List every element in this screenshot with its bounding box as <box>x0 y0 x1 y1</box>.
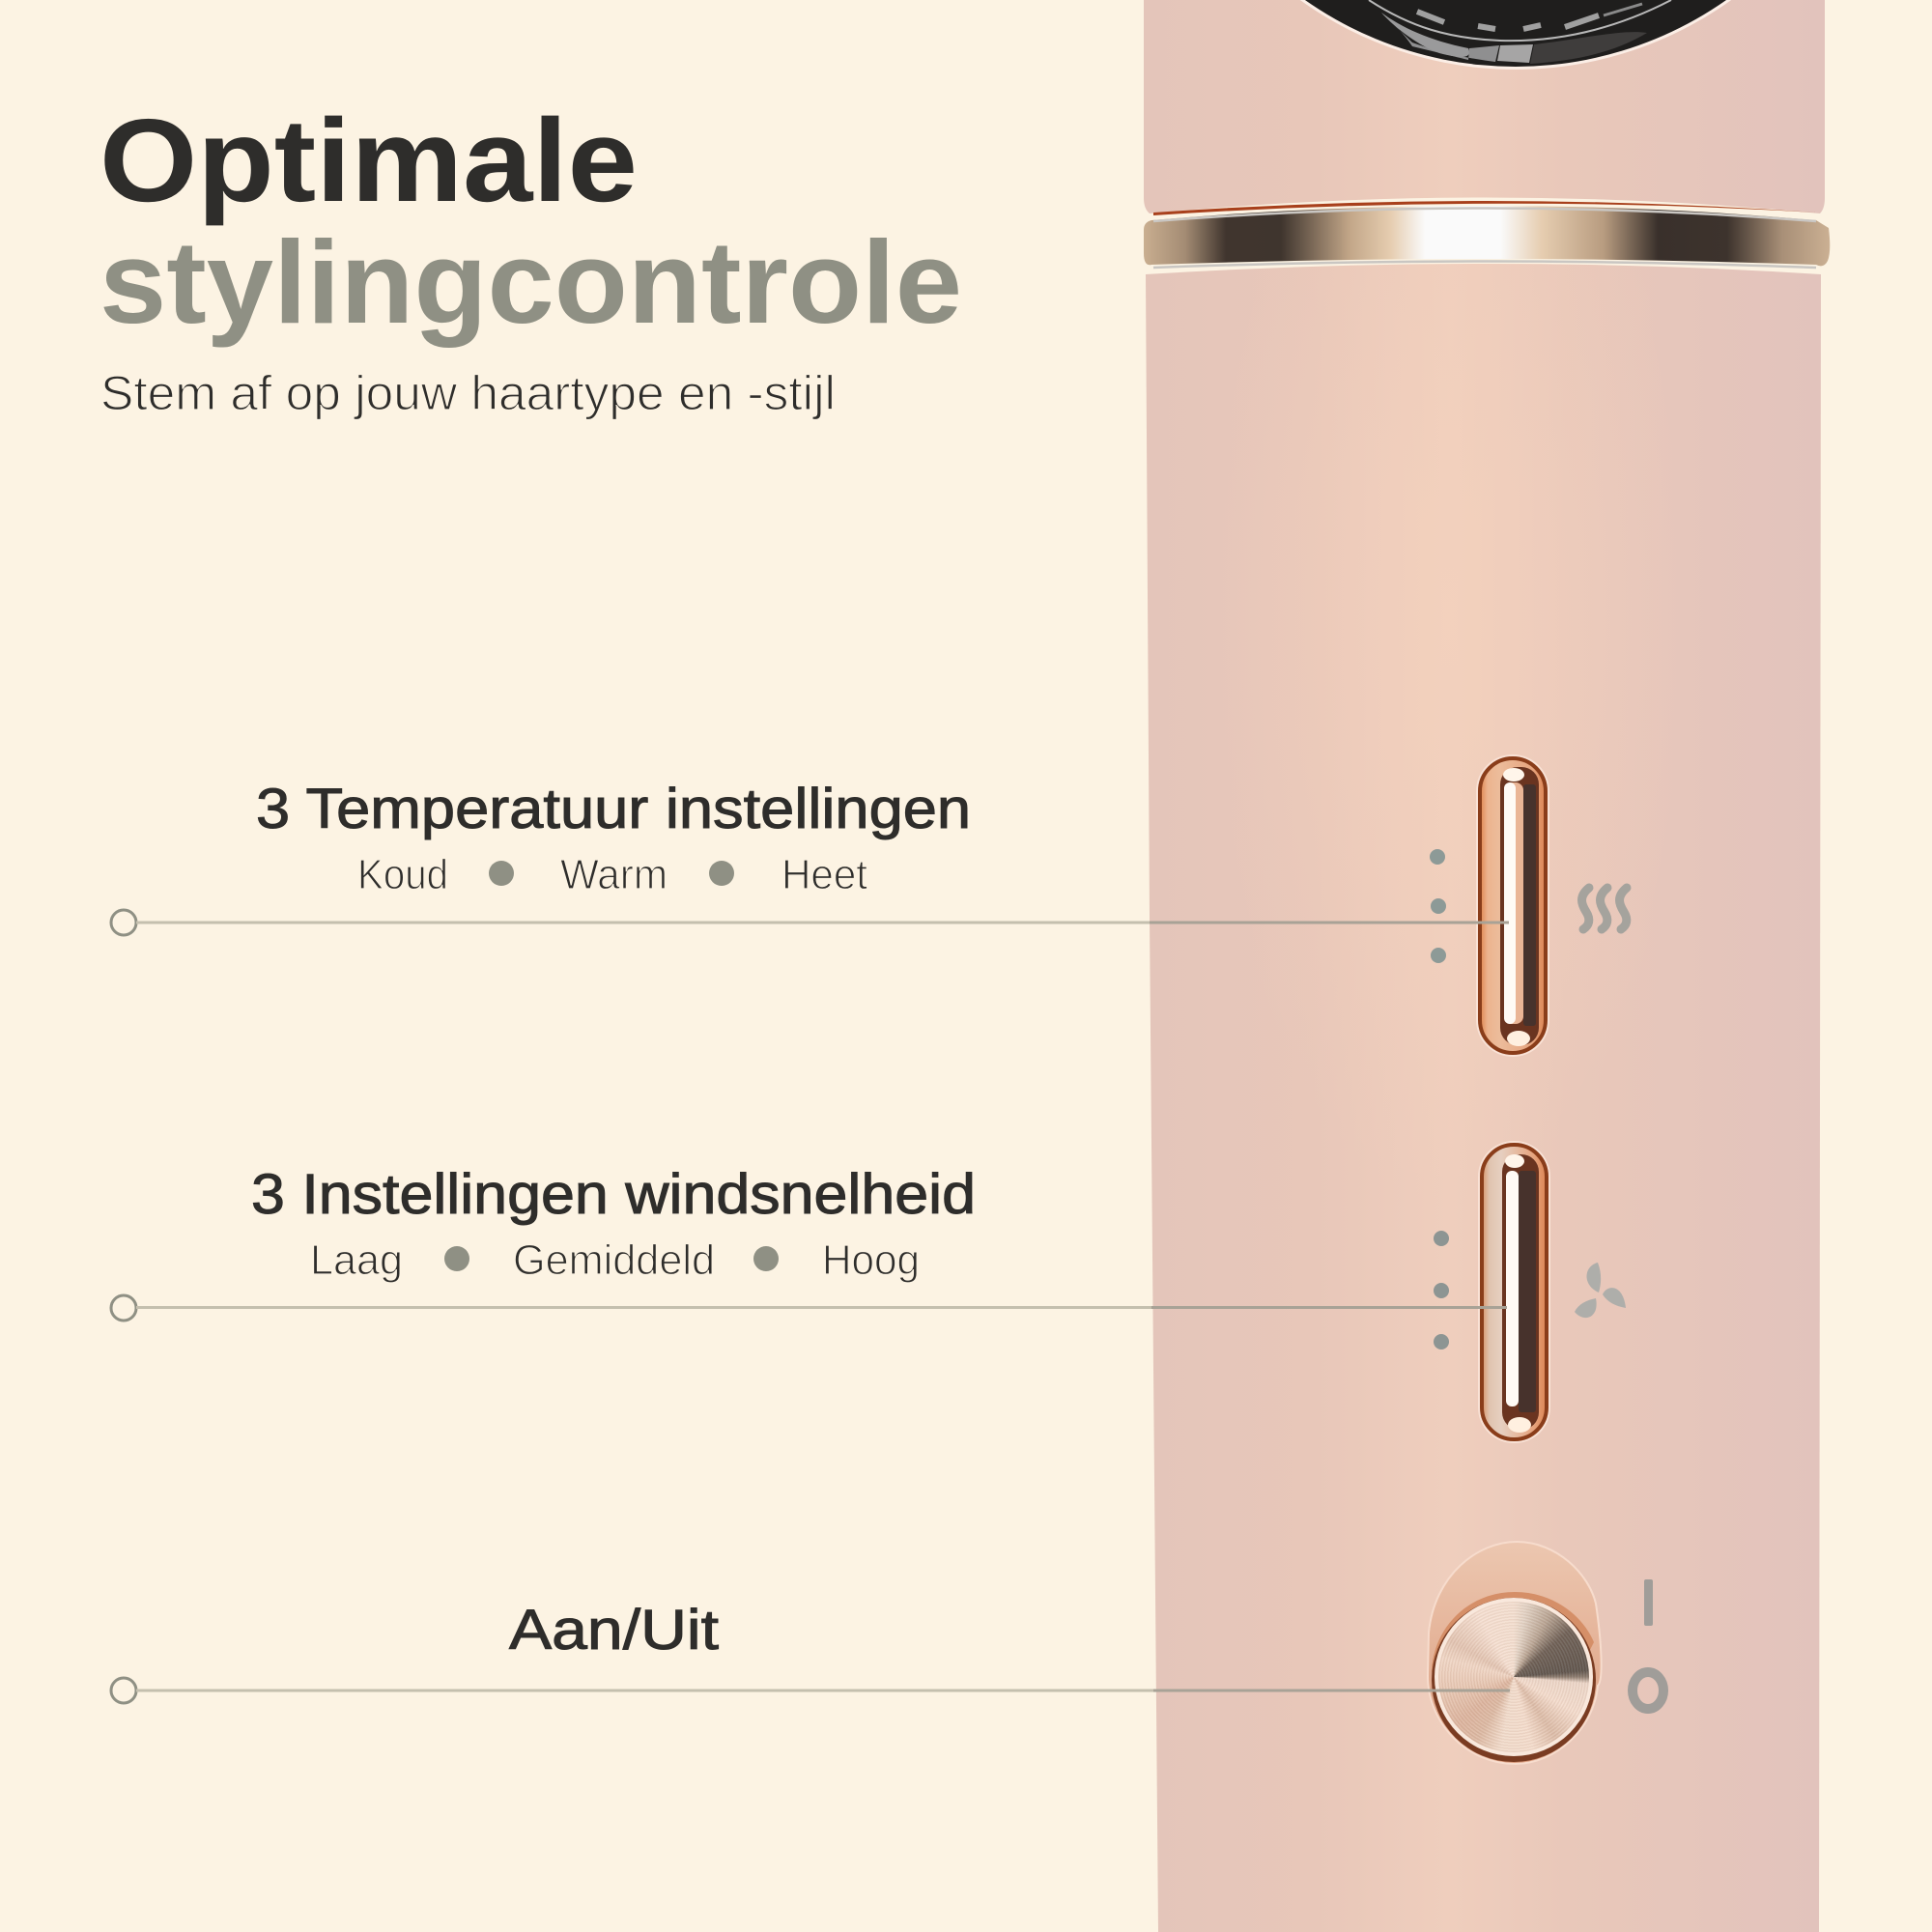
title <box>99 95 962 348</box>
brushed metal dial <box>1438 1602 1589 1752</box>
title line two: stylingcontrole <box>99 216 962 348</box>
title line one: Optimale <box>99 95 638 226</box>
dryer lower body <box>1146 264 1821 1932</box>
temperature options: Warm <box>560 851 668 898</box>
icon: off mark <box>1633 1672 1663 1709</box>
hair dryer illustration <box>1144 0 1885 1932</box>
power switch <box>1428 1542 1602 1764</box>
wind level dots <box>1434 1231 1449 1350</box>
ring edge highlights <box>1153 209 1816 268</box>
icon: on mark <box>1644 1579 1653 1626</box>
wind speed slider <box>1478 1141 1550 1443</box>
wind options: Gemiddeld <box>513 1236 715 1284</box>
switch housing <box>1428 1542 1602 1764</box>
callout: temperature <box>111 778 1509 935</box>
body highlight <box>1146 264 1821 1932</box>
wind options: Hoog <box>822 1236 920 1284</box>
callout: power <box>111 1599 1510 1703</box>
copper trim line <box>1153 201 1816 215</box>
temperature options: Heet <box>781 851 867 898</box>
wind leader line <box>111 1295 1507 1321</box>
wind options: Laag <box>310 1236 403 1284</box>
wind heading: 3 Instellingen windsnelheid <box>251 1163 976 1226</box>
lens housing <box>1147 0 1885 70</box>
temperature options <box>357 851 867 898</box>
temperature options: Koud <box>357 851 448 898</box>
icon: fan <box>1575 1263 1626 1318</box>
callout: wind speed <box>111 1163 1507 1321</box>
temperature slider <box>1476 754 1549 1057</box>
temperature heading: 3 Temperatuur instellingen <box>256 778 971 840</box>
gold ring <box>1144 206 1830 266</box>
switch shadow crescent <box>1432 1592 1594 1690</box>
subtitle: Stem af op jouw haartype en -stijl <box>100 366 836 420</box>
temperature leader line <box>111 910 1509 935</box>
dryer upper body <box>1144 0 1825 213</box>
power heading: Aan/Uit <box>509 1599 719 1662</box>
power leader line <box>111 1678 1510 1703</box>
switch shadow ring <box>1432 1598 1596 1762</box>
icon: heat waves <box>1582 888 1627 929</box>
temperature level dots <box>1430 849 1446 963</box>
wind options <box>310 1236 920 1284</box>
